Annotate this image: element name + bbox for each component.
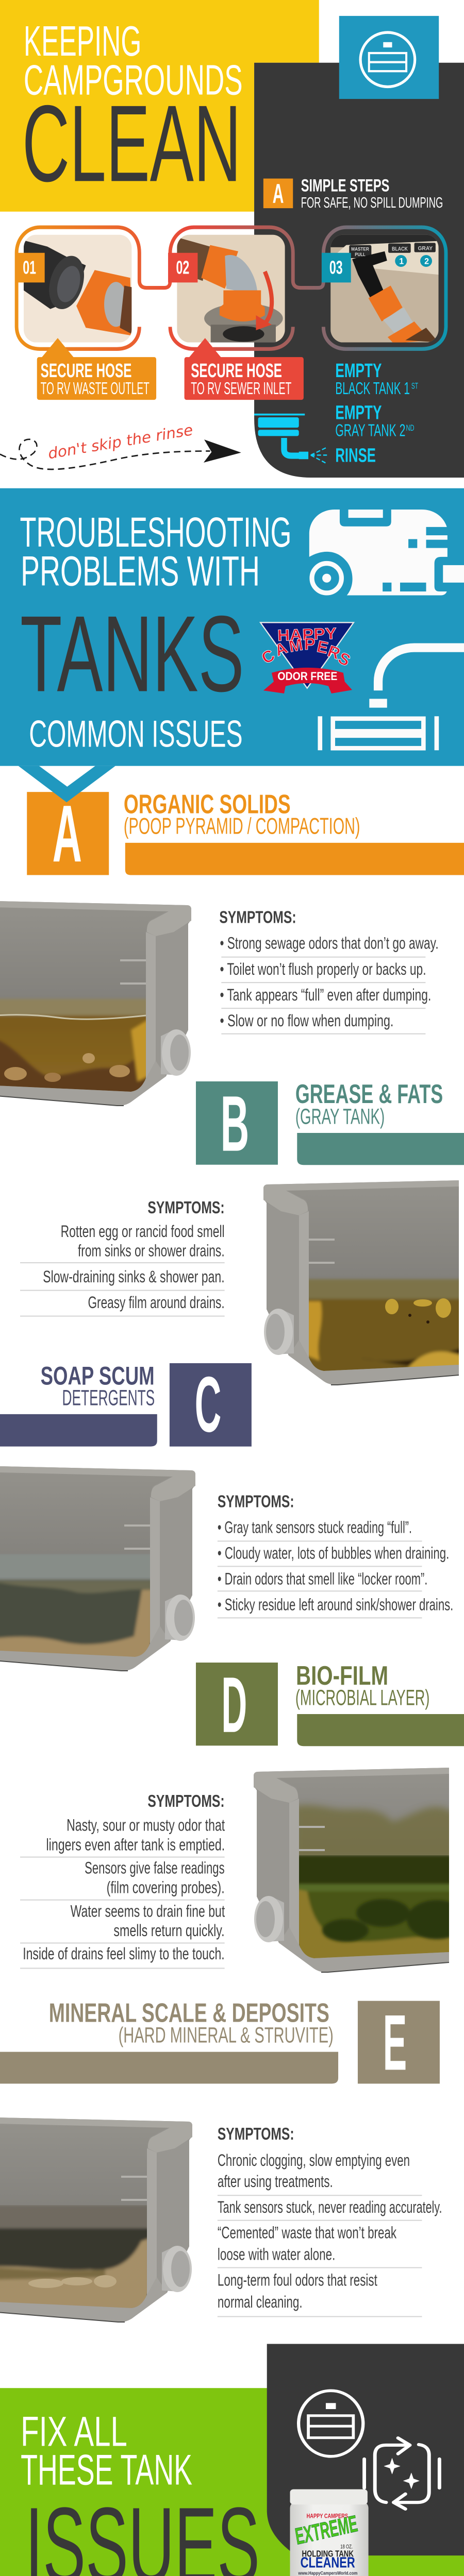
list: empty and rinse steps: EMPTY bbox=[335, 360, 382, 381]
symptoms list D: (film covering probes). bbox=[107, 1878, 225, 1897]
heading: simple steps bbox=[263, 176, 443, 211]
issue A heading bbox=[27, 789, 464, 879]
title: troubleshooting problems with tanks: PROBLEMS WITH bbox=[21, 548, 260, 595]
issue B heading: (GRAY TANK) bbox=[295, 1104, 385, 1129]
symptoms list B: Greasy film around drains. bbox=[88, 1294, 225, 1312]
symptoms list C: SYMPTOMS: bbox=[218, 1492, 294, 1511]
section: symptoms E and fix all issues bbox=[0, 2195, 464, 2576]
heading: simple steps: SIMPLE STEPS bbox=[301, 176, 389, 196]
photo: step 3 master pull: BLACK bbox=[392, 246, 408, 252]
symptoms list B bbox=[20, 1198, 225, 1317]
logo: happy campers odor free bbox=[258, 622, 354, 693]
list: empty and rinse steps: BLACK TANK 1 bbox=[335, 379, 410, 398]
title: troubleshooting problems with tanks: TROUBLESHOOTING bbox=[20, 509, 291, 556]
symptoms list A: SYMPTOMS: bbox=[219, 908, 296, 927]
tank illustration B: grease and fats bbox=[263, 1180, 464, 1385]
photo: step 3 master pull bbox=[330, 235, 439, 343]
issue C heading: DETERGENTS bbox=[62, 1385, 155, 1410]
section: symptoms A and issue B bbox=[20, 908, 464, 1317]
issue E heading bbox=[0, 1998, 440, 2087]
symptoms list D: Water seems to drain fine but bbox=[71, 1902, 225, 1921]
arrow: don't skip the rinse: don't skip the rinse bbox=[47, 421, 194, 463]
issue A heading: ORGANIC SOLIDS bbox=[124, 789, 291, 819]
tank illustration A: organic solids bbox=[0, 901, 191, 1106]
symptoms list D: Inside of drains feel slimy to the touch. bbox=[23, 1945, 225, 1963]
section: issues C and D bbox=[0, 1360, 464, 1749]
photo: step 3 master pull: 1 bbox=[399, 256, 404, 266]
icon: faucet over tank bbox=[318, 648, 464, 750]
symptoms list D bbox=[20, 1792, 225, 1969]
photo: step 3 master pull: MASTER bbox=[351, 246, 369, 252]
issue C heading: C bbox=[195, 1360, 221, 1448]
icon: tank in circle bbox=[299, 2391, 363, 2456]
section: troubleshooting tanks bbox=[0, 488, 464, 879]
product jar: extreme holding tank cleaner: 18 OZ. bbox=[340, 2543, 353, 2550]
product jar: extreme holding tank cleaner: HOLDING TANK bbox=[302, 2549, 354, 2559]
product jar: extreme holding tank cleaner: HAPPY CAMPERS bbox=[307, 2512, 348, 2520]
list: empty and rinse steps: RINSE bbox=[335, 445, 376, 466]
photo: step 3 master pull: 2 bbox=[424, 256, 429, 266]
symptoms list B: SYMPTOMS: bbox=[147, 1198, 225, 1217]
issue C heading bbox=[0, 1360, 252, 1448]
panel: yellow title block bbox=[0, 0, 319, 212]
symptoms list B: Rotten egg or rancid food smell bbox=[61, 1223, 225, 1241]
title: fix all these tank issues: FIX ALL bbox=[21, 2408, 127, 2455]
photo: step 2 hose to inlet bbox=[177, 235, 285, 343]
step numbers: 01 bbox=[23, 257, 36, 278]
logo: happy campers odor free: CAMPERS bbox=[258, 635, 354, 670]
list: empty and rinse steps: EMPTY bbox=[335, 402, 382, 423]
symptoms list E heading and first item: SYMPTOMS: bbox=[218, 2125, 294, 2144]
photo: step 1 hose to outlet bbox=[24, 235, 131, 343]
list: empty and rinse steps: GRAY TANK 2 bbox=[335, 421, 405, 440]
title: keeping campgrounds clean bbox=[22, 18, 243, 205]
callout: secure hose to inlet: TO RV SEWER INLET bbox=[191, 379, 291, 398]
list: empty and rinse steps: ST bbox=[411, 381, 418, 391]
issue A heading: A bbox=[53, 789, 82, 879]
symptoms list E heading and first item: after using treatments. bbox=[218, 2173, 333, 2191]
logo: happy campers odor free: HAPPY bbox=[277, 624, 337, 645]
section: keeping campgrounds clean bbox=[0, 0, 464, 478]
product jar: extreme holding tank cleaner: EXTREME bbox=[292, 2511, 361, 2550]
issue D heading: BIO-FILM bbox=[296, 1660, 388, 1690]
issue B heading bbox=[196, 1079, 464, 1168]
symptoms list D: lingers even after tank is emptied. bbox=[46, 1836, 225, 1854]
icon: rinse hose bbox=[254, 414, 327, 463]
callout: secure hose to inlet bbox=[185, 338, 304, 400]
symptoms list D: Sensors give false readings bbox=[85, 1859, 225, 1877]
symptoms list D: SYMPTOMS: bbox=[147, 1792, 225, 1811]
step numbers: 02 bbox=[176, 257, 189, 278]
tank illustration D: bio-film bbox=[254, 1768, 464, 1972]
title: fix all these tank issues bbox=[21, 2408, 260, 2576]
title: keeping campgrounds clean: CAMPGROUNDS bbox=[24, 57, 243, 104]
logo: happy campers odor free: ODOR FREE bbox=[277, 670, 337, 683]
symptoms list E heading and first item bbox=[218, 2125, 410, 2191]
chevron pointer bbox=[19, 766, 115, 802]
tank illustration E: mineral scale bbox=[0, 2117, 192, 2322]
symptoms list D: smells return quickly. bbox=[113, 1922, 225, 1940]
heading: simple steps: A bbox=[273, 179, 284, 209]
arrow: don't skip the rinse bbox=[0, 421, 241, 469]
panel: blue header bbox=[0, 488, 464, 766]
title: keeping campgrounds clean: KEEPING bbox=[24, 18, 141, 65]
panel: dark steps block bbox=[254, 63, 464, 478]
icon: tank badge bbox=[339, 16, 439, 99]
callout: secure hose to outlet: TO RV WASTE OUTLET bbox=[41, 379, 150, 398]
panel: dark icon block bbox=[267, 2344, 464, 2555]
icon: clean cycle bbox=[364, 2438, 439, 2509]
callout: secure hose to outlet bbox=[37, 338, 156, 400]
list: empty and rinse steps: ND bbox=[406, 423, 415, 433]
symptoms list A bbox=[219, 908, 439, 1035]
issue E heading: E bbox=[383, 1998, 407, 2087]
symptoms list E continued bbox=[218, 2195, 442, 2317]
issue D heading: D bbox=[221, 1661, 247, 1749]
symptoms list D: Nasty, sour or musty odor that bbox=[67, 1816, 225, 1835]
title: troubleshooting problems with tanks bbox=[20, 509, 291, 714]
heading: common issues: COMMON ISSUES bbox=[29, 712, 243, 755]
photo: step 3 master pull: GRAY bbox=[418, 245, 433, 251]
symptoms list C bbox=[218, 1492, 453, 1618]
list: empty and rinse steps bbox=[335, 360, 418, 466]
icon: RV tank truck bbox=[309, 510, 464, 595]
issue D heading bbox=[196, 1660, 464, 1749]
symptoms list E continued: normal cleaning. bbox=[218, 2293, 303, 2312]
issue B heading: B bbox=[221, 1080, 249, 1168]
callout: secure hose to outlet: SECURE HOSE bbox=[41, 360, 131, 381]
symptoms list E continued: loose with water alone. bbox=[218, 2246, 335, 2264]
photo: step 3 master pull: PULL bbox=[355, 252, 366, 257]
title: troubleshooting problems with tanks: TANKS bbox=[20, 593, 244, 714]
connector frame: three steps bbox=[16, 227, 446, 349]
symptoms list B: from sinks or shower drains. bbox=[78, 1242, 225, 1260]
issue C heading: SOAP SCUM bbox=[41, 1361, 155, 1391]
callout: secure hose to inlet: SECURE HOSE bbox=[191, 360, 282, 381]
symptoms list B: Slow-draining sinks & shower pan. bbox=[43, 1268, 225, 1286]
panel: green band bbox=[0, 2388, 464, 2576]
step numbers: 03 bbox=[329, 257, 343, 278]
step numbers bbox=[15, 253, 351, 282]
title: keeping campgrounds clean: CLEAN bbox=[22, 82, 241, 205]
product jar: extreme holding tank cleaner: CLEANER bbox=[301, 2554, 355, 2571]
tank illustration C: soap scum bbox=[0, 1466, 195, 1671]
product jar: extreme holding tank cleaner: www.HappyCampersWorld.com bbox=[298, 2571, 358, 2576]
title: fix all these tank issues: THESE TANK bbox=[21, 2446, 192, 2494]
section: symptoms D and issue E bbox=[0, 1792, 440, 2191]
product jar: extreme holding tank cleaner bbox=[290, 2489, 374, 2576]
